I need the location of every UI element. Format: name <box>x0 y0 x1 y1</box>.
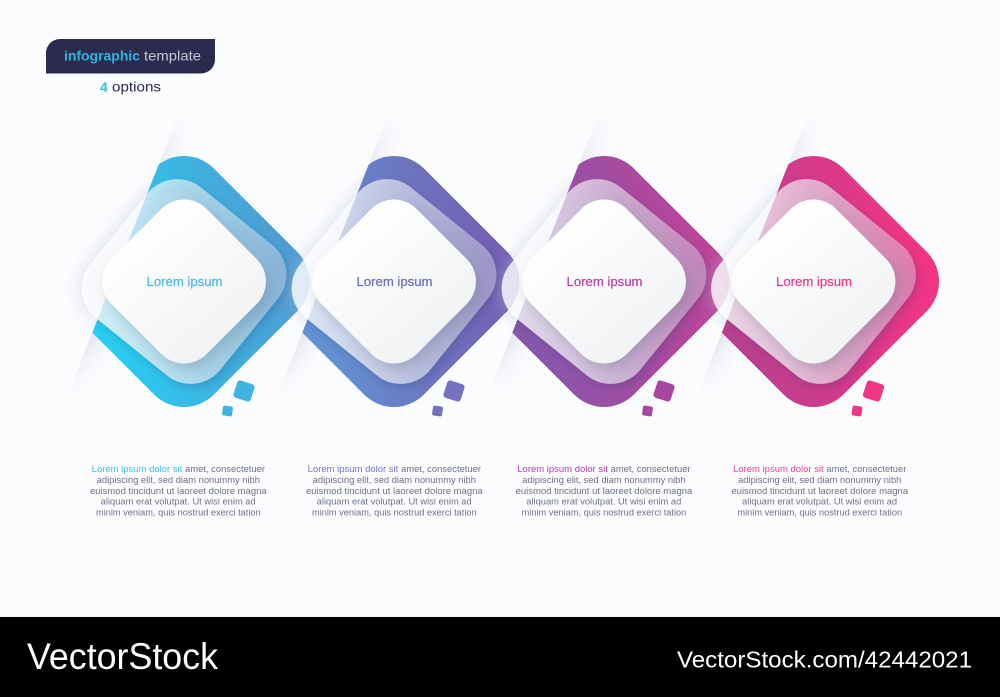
small square accent <box>222 405 233 417</box>
inner white diamond <box>732 200 895 363</box>
footer brand: VectorStock <box>27 636 218 677</box>
inner shadow <box>526 206 690 369</box>
subtitle <box>100 78 161 95</box>
description 3: adipiscing elit, sed diam nonummy nibh <box>522 475 686 485</box>
inner white diamond <box>522 200 686 363</box>
small square accent <box>432 405 443 417</box>
description 2: Lorem ipsum dolor sit <box>308 464 399 474</box>
description 3: euismod tincidunt ut laoreet dolore magna <box>516 486 692 496</box>
large square accent <box>443 380 465 402</box>
small square accent <box>851 405 863 417</box>
description 1: aliquam erat volutpat. Ut wisi enim ad <box>101 497 256 507</box>
option label: Lorem ipsum <box>146 274 222 289</box>
soft glow <box>493 182 571 325</box>
footer url: VectorStock.com/42442021 <box>677 646 972 672</box>
inner shadow <box>106 206 270 369</box>
description 4 <box>731 464 908 517</box>
description 4: euismod tincidunt ut laoreet dolore magna <box>731 486 908 496</box>
outer diamond <box>512 156 730 407</box>
large square accent <box>862 380 885 402</box>
description 2: aliquam erat volutpat. Ut wisi enim ad <box>317 497 472 507</box>
option label: Lorem ipsum <box>776 274 852 289</box>
outer diamond <box>92 156 310 407</box>
badge title light: template <box>144 48 201 64</box>
badge title bold: infographic <box>64 48 140 64</box>
option 3 diamond <box>493 134 730 416</box>
outer diamond <box>722 156 939 407</box>
option 2 diamond <box>283 134 520 416</box>
middle translucent diamond <box>281 169 507 394</box>
description 4: adipiscing elit, sed diam nonummy nibh <box>738 475 901 485</box>
description 1: adipiscing elit, sed diam nonummy nibh <box>97 475 260 485</box>
slanted band shadow <box>76 134 174 374</box>
inner shadow <box>736 206 899 369</box>
description 2: amet, consectetuer <box>401 464 481 474</box>
badge shape <box>46 39 215 74</box>
description 4: aliquam erat volutpat. Ut wisi enim ad <box>742 497 897 507</box>
description 2: adipiscing elit, sed diam nonummy nibh <box>313 475 476 485</box>
soft glow <box>283 182 361 325</box>
description 2 <box>306 464 483 517</box>
large square accent <box>653 380 675 402</box>
option label: Lorem ipsum <box>356 274 432 289</box>
description 1: amet, consectetuer <box>185 464 265 474</box>
inner white diamond <box>312 200 476 363</box>
description 2: minim veniam, quis nostrud exerci tation <box>312 507 477 517</box>
description 1: euismod tincidunt ut laoreet dolore magna <box>90 486 267 496</box>
option count: 4 <box>100 79 108 95</box>
footer background <box>0 617 1000 697</box>
description 3 <box>516 464 692 517</box>
description 1: Lorem ipsum dolor sit <box>92 464 183 474</box>
option word: options <box>112 78 161 94</box>
description 3: amet, consectetuer <box>611 464 691 474</box>
small square accent <box>642 405 653 417</box>
description 2: euismod tincidunt ut laoreet dolore magna <box>306 486 483 496</box>
description 4: minim veniam, quis nostrud exerci tation <box>737 507 902 517</box>
description 1: minim veniam, quis nostrud exerci tation <box>96 507 261 517</box>
description 4: Lorem ipsum dolor sit <box>733 464 824 474</box>
slanted band shadow <box>286 134 384 374</box>
outer diamond <box>302 156 520 407</box>
slanted band shadow <box>706 134 803 374</box>
description 4: amet, consectetuer <box>826 464 906 474</box>
middle translucent diamond <box>701 169 926 394</box>
middle translucent diamond <box>71 169 297 394</box>
description 3: minim veniam, quis nostrud exerci tation <box>522 507 686 517</box>
description 3: Lorem ipsum dolor sit <box>517 464 608 474</box>
slanted band shadow <box>496 134 593 374</box>
soft glow <box>74 182 151 325</box>
inner shadow <box>316 206 480 369</box>
middle translucent diamond <box>491 169 717 394</box>
inner white diamond <box>102 200 266 363</box>
option 1 diamond <box>74 134 310 416</box>
footer bar <box>0 617 1000 697</box>
title badge <box>46 39 215 74</box>
description 3: aliquam erat volutpat. Ut wisi enim ad <box>526 497 681 507</box>
description 1 <box>90 464 267 517</box>
option label: Lorem ipsum <box>566 274 642 289</box>
soft glow <box>702 182 780 325</box>
option 4 diamond <box>702 134 939 416</box>
large square accent <box>233 380 255 402</box>
